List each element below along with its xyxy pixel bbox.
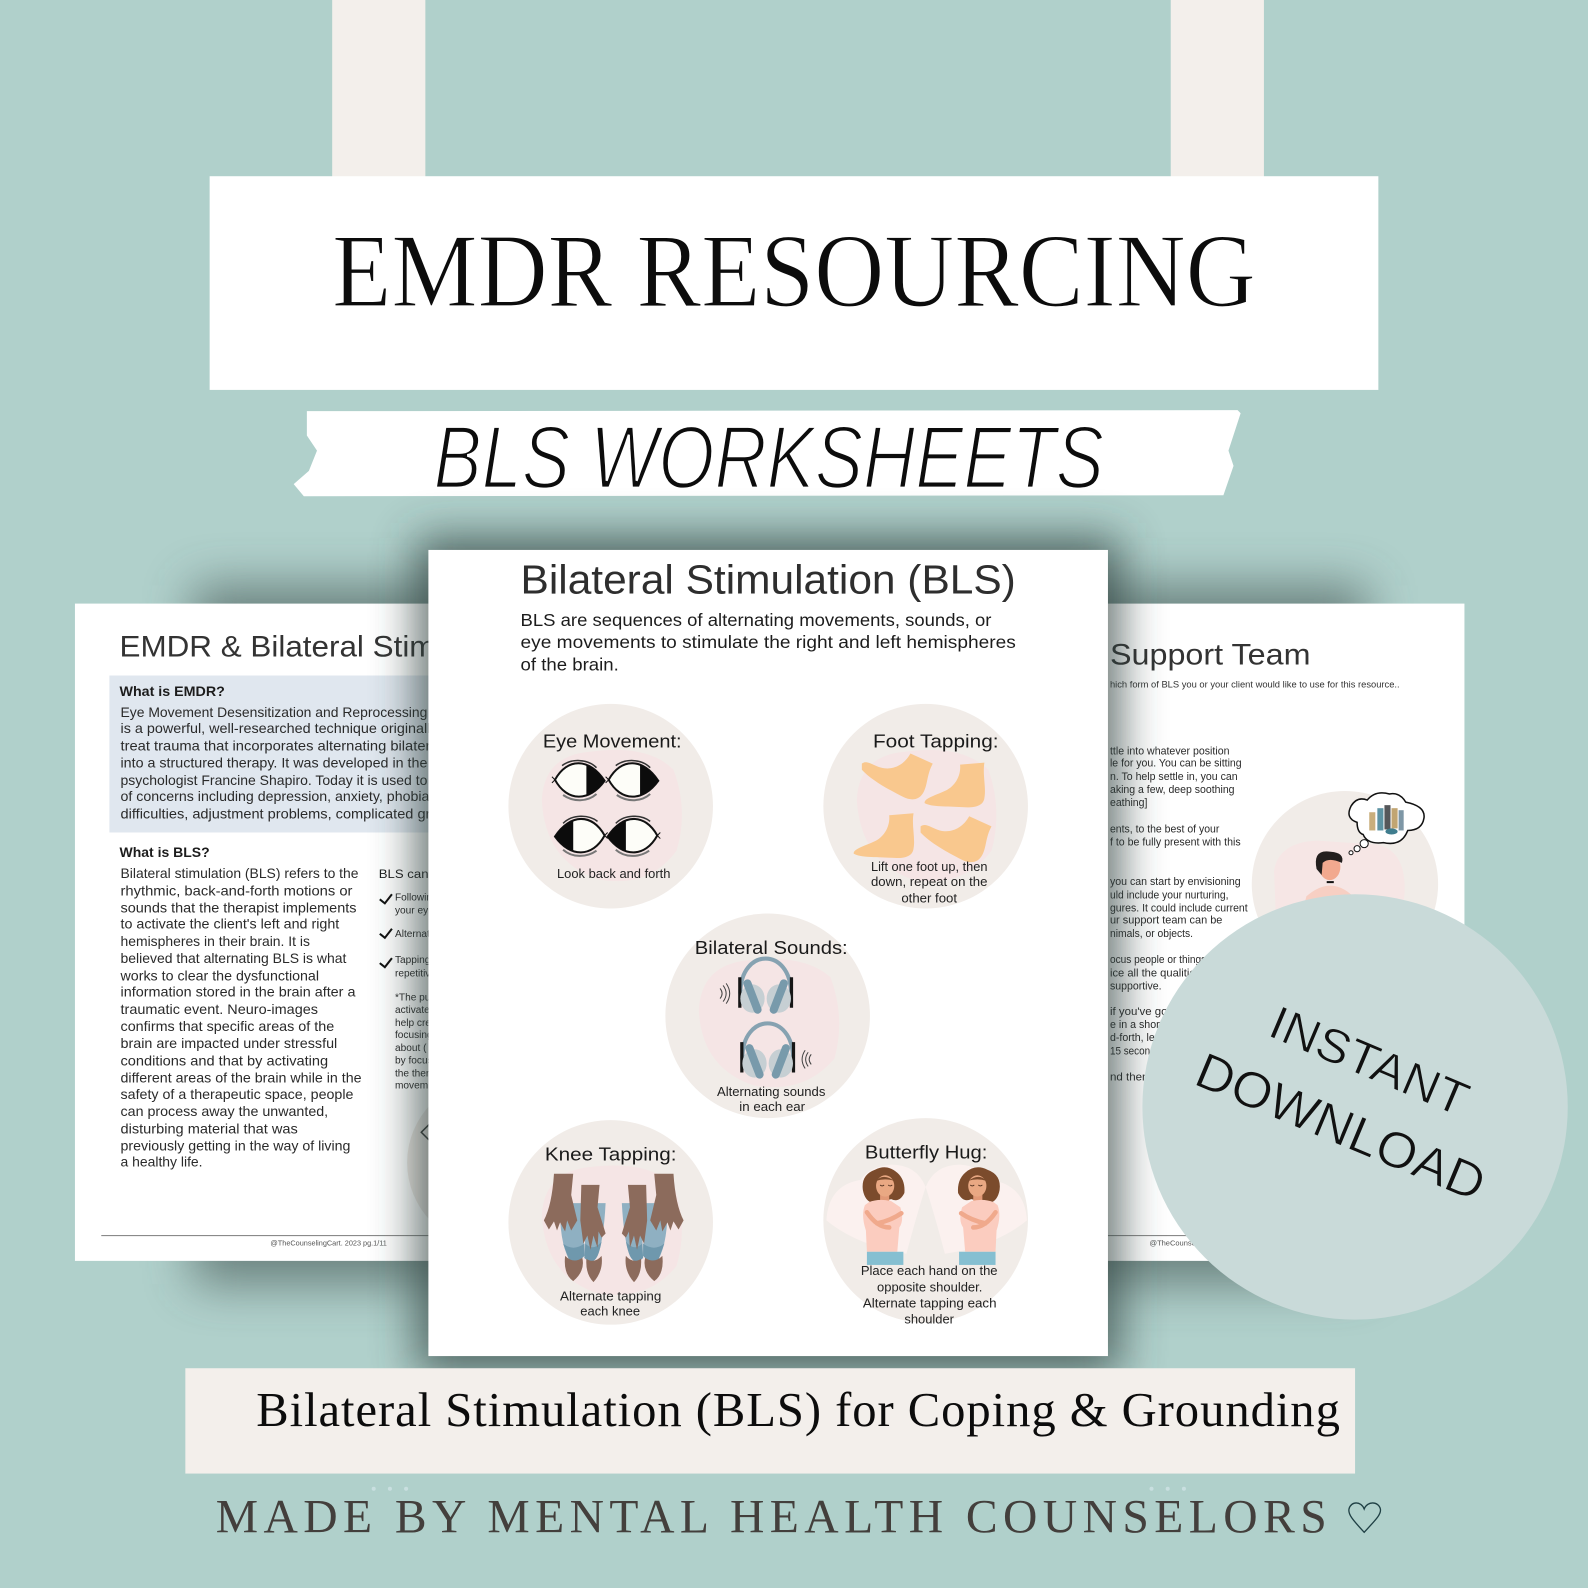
intro text — [521, 610, 1016, 674]
what is BLS text block: conditions and that by activating — [121, 1053, 328, 1068]
what is BLS text block: information stored in the brain after a — [121, 985, 356, 1000]
what is BLS text block: a healthy life. — [121, 1155, 203, 1170]
what is EMDR box: psychologist Francine Shapiro. Today it is used to — [121, 773, 427, 788]
side pages shadow — [192, 585, 1367, 1284]
what is BLS text block: disturbing material that was — [121, 1121, 298, 1136]
what is BLS text block: hemispheres in their brain. It is — [121, 934, 310, 949]
panel: bilateral sounds: Bilateral Sounds: — [695, 937, 848, 958]
what is BLS text block: can process away the unwanted, — [121, 1104, 328, 1119]
instructions text block: nd then — [1110, 1072, 1149, 1084]
BLS can help list: Alternating — [395, 929, 443, 940]
instructions text block: e in a short — [1110, 1019, 1163, 1031]
illustration: person imagining support team — [1252, 791, 1438, 977]
worksheet page: bilateral stimulation — [428, 550, 1108, 1356]
page heading: Bilateral Stimulation (BLS) — [521, 556, 1016, 602]
BLS can help list: BLS can h — [379, 868, 440, 881]
what is BLS text block — [119, 845, 362, 1170]
BLS can help list — [379, 868, 456, 1092]
subtitle banner — [294, 407, 1241, 507]
BLS can help list: the therapy — [395, 1069, 447, 1080]
instructions text block: ents, to the best of your — [1110, 823, 1220, 835]
panel: butterfly hug: Butterfly Hug: — [865, 1142, 987, 1163]
instructions text block: n. To help settle in, you can — [1110, 771, 1238, 783]
icon: headphones with sound at left — [720, 959, 791, 1013]
instructions text block: d-forth, left — [1110, 1032, 1161, 1044]
what is EMDR box: What is EMDR? — [120, 684, 225, 700]
icon: eyes looking right — [552, 761, 660, 801]
BLS can help list: help creates — [395, 1018, 450, 1029]
instructions text block: you can start by envisioning — [1110, 876, 1241, 888]
BLS can help list: about ( — [395, 1043, 427, 1054]
panel: foot tapping: Lift one foot up, then — [871, 860, 987, 874]
what is BLS text block: brain are impacted under stressful — [121, 1036, 337, 1051]
what is EMDR box — [109, 676, 440, 832]
panel: foot tapping: Foot Tapping: — [873, 730, 999, 751]
panel: knee tapping: each knee — [580, 1305, 640, 1319]
decorative dots — [372, 1487, 1186, 1491]
icon: eyes looking left — [553, 816, 660, 857]
instructions text block: ocus people or things — [1110, 954, 1206, 966]
page footer: @TheCounselingCart. 2023 pg.2/11 — [1149, 1239, 1269, 1248]
what is BLS text block: rhythmic, back-and-forth motions or — [121, 883, 353, 898]
center page shadow — [416, 538, 1120, 1372]
icon: headphones with sound at right — [742, 1023, 811, 1078]
what is BLS text block: previously getting in the way of living — [121, 1138, 350, 1153]
what is EMDR box: difficulties, adjustment problems, complicated gr — [121, 806, 431, 821]
instant download badge: DOWNLOAD — [1188, 1041, 1494, 1212]
panel: foot tapping — [823, 704, 1028, 908]
what is BLS text block: What is BLS? — [120, 845, 210, 861]
what is EMDR box: is a powerful, well-researched technique originall — [121, 721, 430, 736]
panel: butterfly hug: shoulder — [904, 1313, 954, 1327]
page heading: Support Team — [1110, 638, 1311, 671]
panel: butterfly hug — [823, 1118, 1028, 1327]
instructions text block: ice all the qualities — [1110, 967, 1201, 979]
panel: bilateral sounds: Alternating sounds — [717, 1085, 825, 1099]
title: EMDR RESOURCING — [332, 212, 1256, 329]
what is BLS text block: confirms that specific areas of the — [121, 1019, 334, 1034]
worksheet page: EMDR and bilateral stimulation — [75, 604, 575, 1261]
panel: knee tapping — [508, 1120, 713, 1325]
instructions text block: f to be fully present with this — [1110, 837, 1241, 849]
instructions text block: ur support team can be — [1110, 915, 1222, 927]
page heading: EMDR & Bilateral Stim — [120, 630, 435, 663]
what is BLS text block: Bilateral stimulation (BLS) refers to the — [121, 866, 359, 881]
BLS can help list: by focusing — [395, 1055, 446, 1066]
instruction line: hich form of BLS you or your client would like to use for this resource.. — [1110, 680, 1400, 691]
BLS can help list: Following — [395, 892, 438, 903]
icon: woman hugging self mirrored — [958, 1167, 1000, 1265]
intro text: of the brain. — [521, 654, 619, 674]
what is BLS text block: sounds that the therapist implements — [121, 900, 357, 915]
BLS can help list: movements — [395, 1081, 447, 1092]
what is EMDR box: Eye Movement Desensitization and Reprocessing — [121, 705, 427, 720]
subtitle bar: Bilateral Stimulation (BLS) for Coping & Grounding — [256, 1383, 1340, 1437]
instructions text block: nimals, or objects. — [1110, 928, 1193, 940]
what is EMDR box: treat trauma that incorporates alternating bilater — [121, 738, 431, 753]
what is BLS text block: different areas of the brain while in the — [121, 1071, 362, 1086]
hanging strap left — [332, 0, 425, 182]
panel: eye movement: Eye Movement: — [543, 730, 682, 751]
panel: foot tapping: down, repeat on the — [871, 875, 987, 889]
instructions text block: le for you. You can be sitting — [1110, 758, 1242, 770]
instructions text block: if you've got — [1110, 1006, 1171, 1018]
icon: heart — [1349, 1503, 1381, 1532]
instant download badge: INSTANT — [1262, 996, 1476, 1127]
footer tagline: MADE BY MENTAL HEALTH COUNSELORS — [216, 1491, 1327, 1543]
subtitle bar — [185, 1368, 1355, 1474]
panel: butterfly hug: Place each hand on the — [861, 1264, 998, 1278]
thought cloud — [1349, 793, 1424, 855]
instructions text block: 15 seconds — [1110, 1045, 1161, 1057]
title panel — [210, 176, 1378, 390]
panel: butterfly hug: Alternate tapping each — [863, 1296, 997, 1310]
panel: bilateral sounds — [665, 914, 870, 1118]
icon: hands on knees — [544, 1174, 684, 1282]
worksheet page: support team — [1098, 604, 1464, 1261]
panel: knee tapping: Knee Tapping: — [545, 1144, 677, 1165]
intro text: eye movements to stimulate the right and left hemispheres — [521, 632, 1016, 652]
panel: butterfly hug: opposite shoulder. — [877, 1280, 982, 1294]
BLS can help list: activates — [395, 1005, 435, 1016]
instructions text block: gures. It could include current — [1110, 902, 1248, 914]
instructions text block: eathing] — [1110, 797, 1147, 809]
panel: foot tapping: other foot — [901, 891, 958, 905]
partially hidden circle illustration — [407, 1079, 575, 1247]
what is BLS text block: to activate the client's left and right — [121, 917, 340, 932]
instructions text block: uld include your nurturing, — [1110, 889, 1228, 901]
hanging strap right — [1171, 0, 1264, 182]
instructions text block: aking a few, deep soothing — [1110, 784, 1235, 796]
BLS can help list: your eyes — [395, 906, 439, 917]
intro text: BLS are sequences of alternating movements, sounds, or — [521, 610, 992, 630]
BLS can help list: Tapping — [395, 955, 430, 966]
instructions text block: ttle into whatever position — [1110, 746, 1230, 758]
what is EMDR box: into a structured therapy. It was developed in the — [121, 756, 427, 771]
panel: eye movement — [508, 704, 713, 908]
panel: eye movement: Look back and forth — [557, 867, 670, 881]
BLS can help list: focusing — [395, 1030, 433, 1041]
what is EMDR box: of concerns including depression, anxiety, phobia — [121, 789, 430, 804]
panel: knee tapping: Alternate tapping — [560, 1289, 661, 1303]
what is BLS text block: traumatic event. Neuro-images — [121, 1002, 318, 1017]
panel: bilateral sounds: in each ear — [739, 1100, 805, 1114]
instant download badge — [1142, 894, 1568, 1320]
subtitle: BLS WORKSHEETS — [433, 407, 1104, 507]
icon: feet — [854, 753, 991, 862]
BLS can help list: repetitive — [395, 968, 436, 979]
what is BLS text block: believed that alternating BLS is what — [121, 951, 347, 966]
page footer: @TheCounselingCart. 2023 pg.1/11 — [270, 1239, 387, 1248]
instructions text block: supportive. — [1110, 980, 1162, 992]
what is BLS text block: works to clear the dysfunctional — [119, 968, 319, 983]
icon: woman hugging self — [863, 1167, 905, 1265]
BLS can help list: *The purpose — [395, 993, 456, 1004]
instructions text block — [1110, 746, 1248, 1084]
what is BLS text block: safety of a therapeutic space, people — [121, 1087, 353, 1102]
